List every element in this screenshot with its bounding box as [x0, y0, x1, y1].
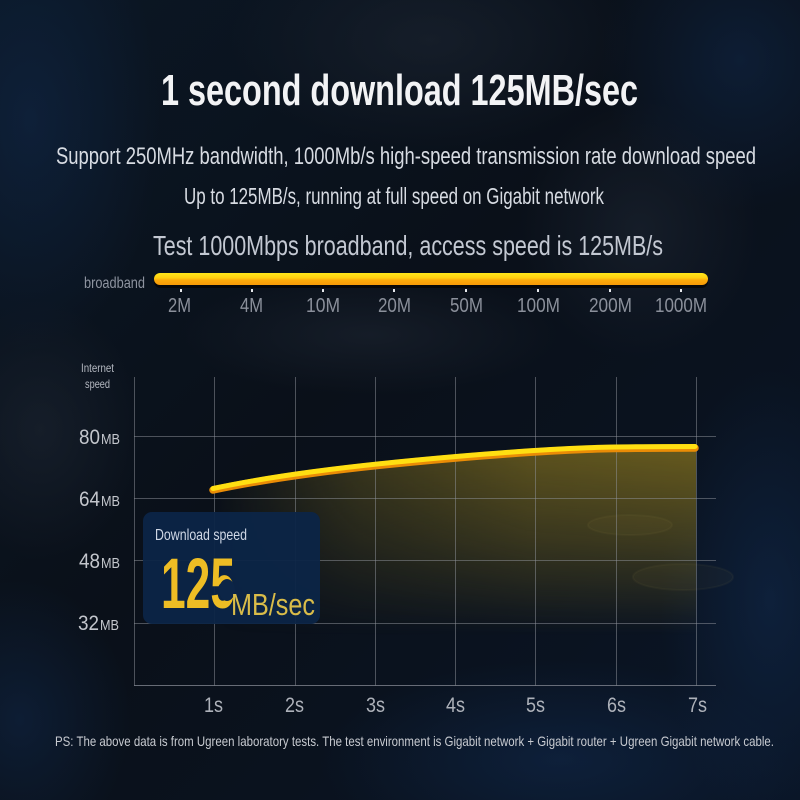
- card label: Download speed: [155, 527, 247, 544]
- scale labels: 1000M: [655, 295, 707, 317]
- scale labels: 100M: [517, 295, 560, 317]
- y axis labels: 32: [78, 612, 99, 635]
- area fill under curve: [242, 452, 696, 619]
- scale ticks: [180, 289, 682, 292]
- y axis title: speed: [85, 377, 110, 391]
- x axis labels: 7s: [688, 694, 707, 717]
- x axis labels: 4s: [446, 694, 465, 717]
- x axis labels: 5s: [526, 694, 545, 717]
- y axis labels: [78, 426, 120, 635]
- scale labels: 200M: [589, 295, 632, 317]
- scale labels: [168, 295, 707, 317]
- card unit: MB/sec: [231, 587, 315, 622]
- smear over the last digit: [219, 579, 235, 601]
- infographic canvas: [56, 74, 773, 749]
- y axis labels: MB: [101, 431, 120, 448]
- chart grid: [134, 377, 716, 686]
- card value: 125: [161, 545, 235, 624]
- scale labels: 10M: [306, 295, 340, 317]
- line chart: internet speed over time: [78, 361, 733, 717]
- scale labels: 50M: [450, 295, 483, 317]
- broadband scale: [84, 273, 708, 317]
- faint ellipses behind chart: [588, 515, 733, 590]
- y axis labels: MB: [101, 555, 120, 572]
- y axis labels: MB: [101, 493, 120, 510]
- bandwidth test heading: Test 1000Mbps broadband, access speed is 125MB/s: [153, 230, 663, 261]
- y axis labels: 80: [79, 426, 100, 449]
- broadband label: broadband: [84, 275, 145, 292]
- scale labels: 4M: [240, 295, 263, 317]
- subtitle line 2: Up to 125MB/s, running at full speed on Gigabit network: [184, 183, 604, 209]
- title: 1 second download 125MB/sec: [161, 66, 638, 115]
- scale labels: 20M: [378, 295, 411, 317]
- yellow progress bar: [154, 273, 708, 288]
- speed curve: [213, 446, 695, 490]
- y axis labels: 48: [79, 550, 100, 573]
- scale labels: 2M: [168, 295, 191, 317]
- x axis labels: 6s: [607, 694, 626, 717]
- y axis labels: 64: [79, 488, 100, 511]
- x axis labels: [204, 694, 707, 717]
- x axis labels: 2s: [285, 694, 304, 717]
- y axis title: [81, 361, 115, 391]
- y axis labels: MB: [100, 617, 119, 634]
- download speed card: [143, 512, 320, 624]
- y axis title: Internet: [81, 361, 115, 375]
- x axis labels: 3s: [366, 694, 385, 717]
- x axis labels: 1s: [204, 694, 223, 717]
